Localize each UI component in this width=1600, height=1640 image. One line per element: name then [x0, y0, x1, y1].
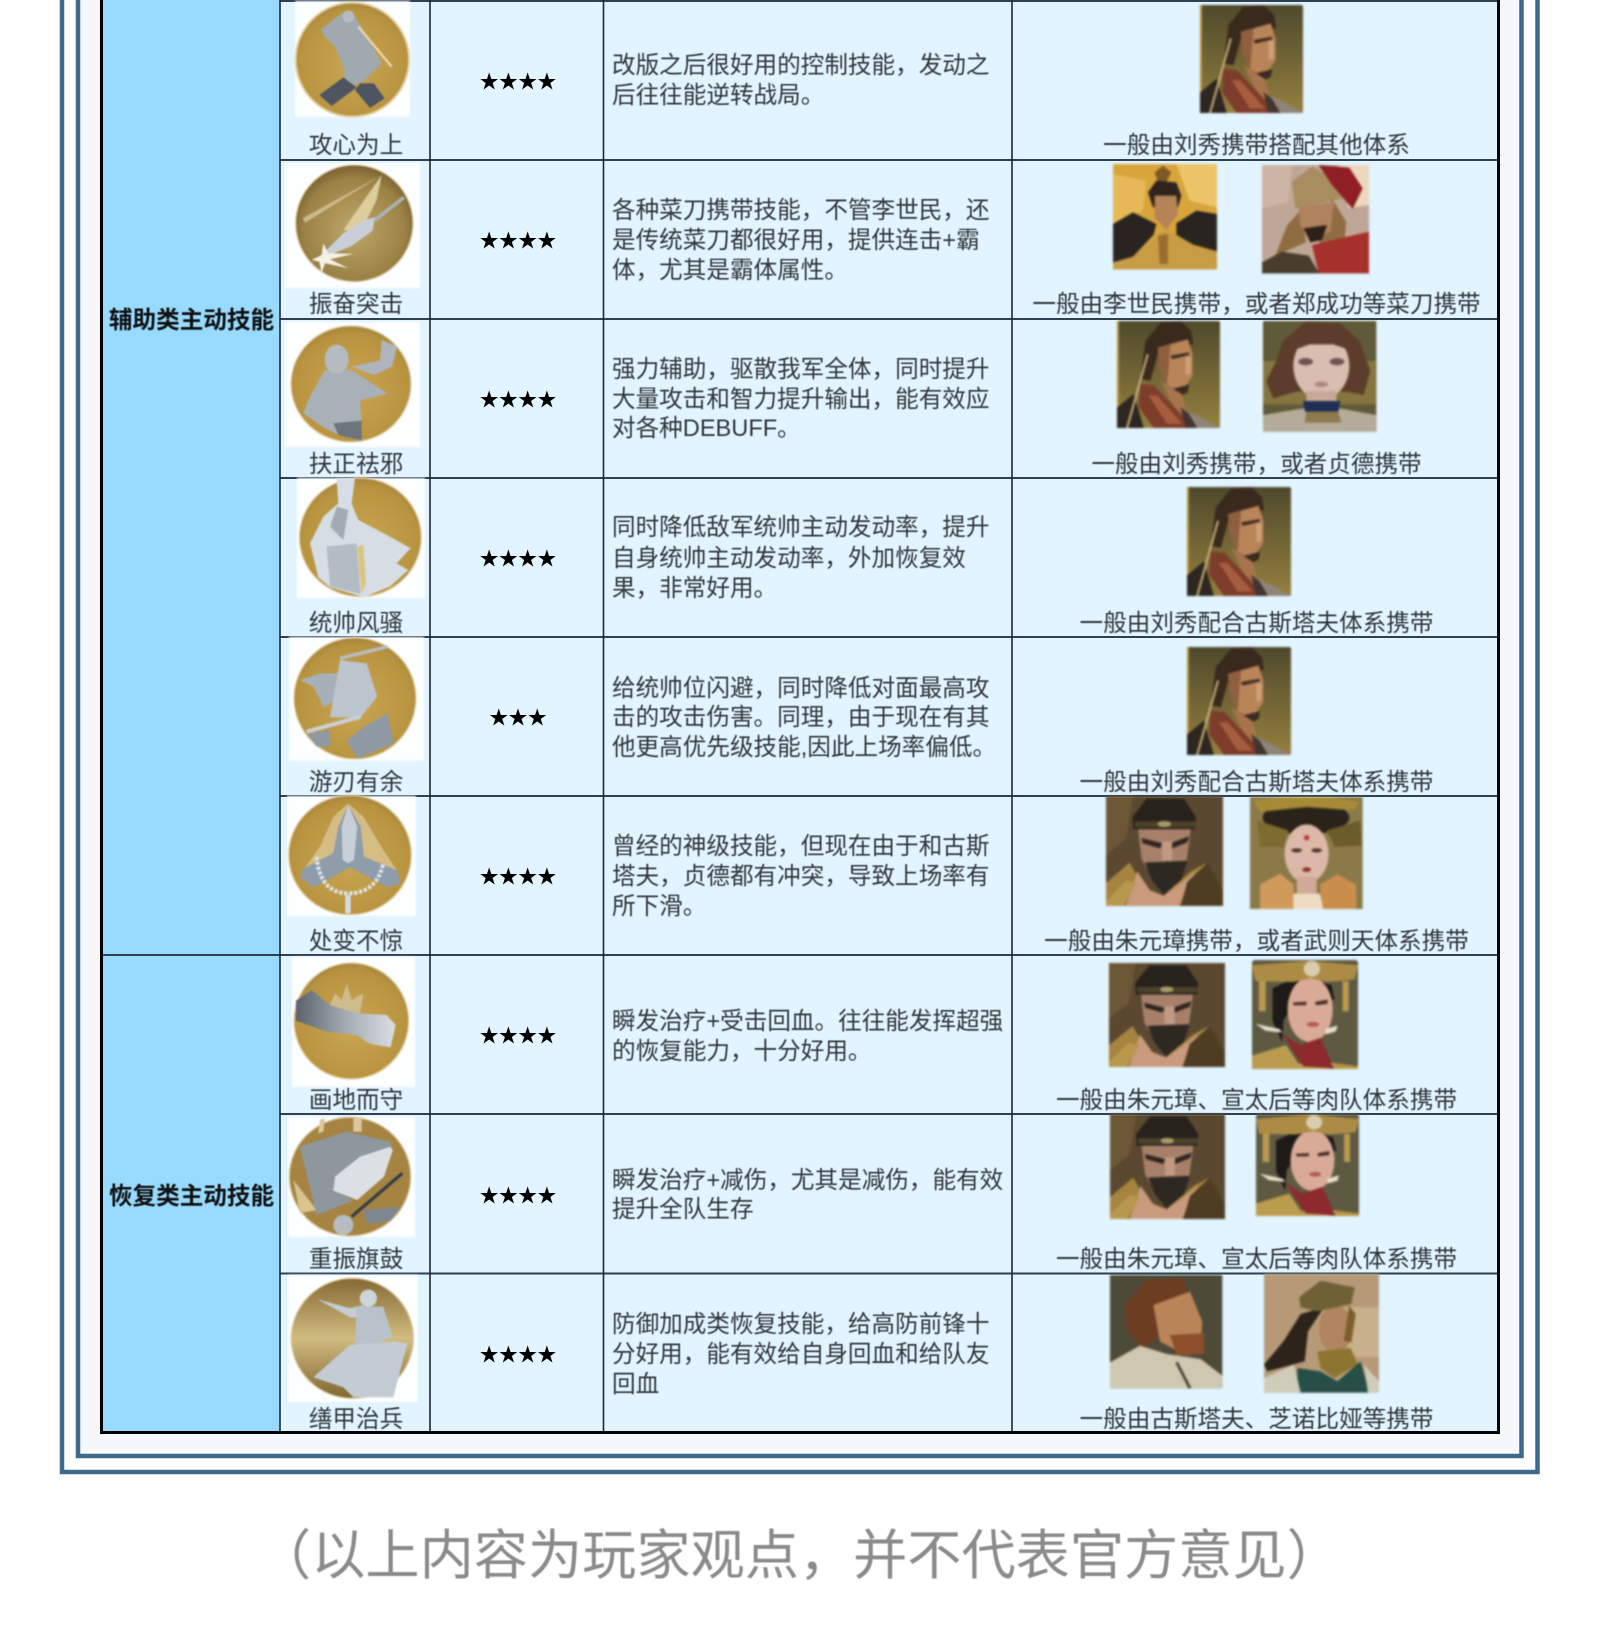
- rating stars: ★★★★: [479, 1339, 557, 1367]
- portrait: 刘秀: [1117, 321, 1220, 428]
- portrait: 刘秀: [1187, 487, 1291, 596]
- description: 瞬发治疗+受击回血。往往能发挥超强: [612, 1008, 1003, 1035]
- row: 处变不惊: [287, 795, 1469, 955]
- carrier note: 一般由刘秀配合古斯塔夫体系携带: [1080, 769, 1433, 796]
- icon: 振奋突击: [285, 163, 420, 288]
- row: 重振旗鼓: [288, 1114, 1457, 1273]
- icon: 攻心为上: [295, 1, 410, 117]
- description: 给统帅位闪避，同时降低对面最高攻: [612, 675, 990, 702]
- portrait: 宣太后: [1256, 1114, 1359, 1216]
- skill name: 重振旗鼓: [309, 1246, 403, 1273]
- description: 果，非常好用。: [612, 575, 777, 602]
- description: [612, 675, 996, 761]
- carrier note: 一般由朱元璋、宣太后等肉队体系携带: [1056, 1246, 1457, 1273]
- skill name: 缮甲治兵: [309, 1406, 403, 1433]
- description: 他更高优先级技能,因此上场率偏低。: [612, 734, 996, 761]
- portrait: 贞德: [1263, 321, 1376, 432]
- category label: 恢复类主动技能: 恢复类主动技能: [109, 1183, 274, 1210]
- description: [612, 52, 990, 109]
- carrier note: 一般由李世民携带，或者郑成功等菜刀携带: [1032, 291, 1481, 318]
- carrier note: 一般由刘秀配合古斯塔夫体系携带: [1080, 610, 1433, 637]
- portrait: 李世民: [1113, 164, 1217, 269]
- description: 体，尤其是霸体属性。: [612, 257, 848, 284]
- description: 后往往能逆转战局。: [612, 82, 824, 109]
- skill name: 扶正祛邪: [309, 451, 403, 478]
- description: [612, 1311, 990, 1398]
- rating stars: ★★★: [489, 702, 547, 730]
- portrait: 朱元璋: [1106, 796, 1223, 906]
- portrait: 古斯塔夫: [1110, 1275, 1222, 1388]
- description: 回血: [612, 1371, 659, 1398]
- description: 防御加成类恢复技能，给高防前锋十: [612, 1311, 990, 1338]
- row: 攻心为上: [295, 1, 1410, 159]
- carrier note: 一般由刘秀携带，或者贞德携带: [1091, 451, 1422, 478]
- skill name: 游刃有余: [309, 769, 404, 796]
- portrait: 宣太后: [1252, 960, 1358, 1069]
- description: [612, 1008, 1003, 1065]
- portrait: 武则天: [1250, 797, 1363, 909]
- description: 的恢复能力，十分好用。: [612, 1038, 872, 1065]
- icon: 重振旗鼓: [288, 1117, 415, 1237]
- row: 统帅风骚: [297, 478, 1433, 637]
- skill name: 振奋突击: [309, 291, 403, 318]
- rating stars: ★★★★: [479, 861, 557, 889]
- description: 大量攻击和智力提升输出，能有效应: [612, 386, 990, 413]
- description: 对各种DEBUFF。: [612, 415, 801, 442]
- icon: 处变不惊: [287, 795, 416, 916]
- description: 各种菜刀携带技能，不管李世民，还: [612, 197, 990, 224]
- carrier note: 一般由朱元璋携带，或者武则天体系携带: [1044, 928, 1469, 955]
- portrait: 刘秀: [1187, 647, 1291, 755]
- rating stars: ★★★★: [479, 1180, 557, 1208]
- description: [612, 514, 990, 602]
- rating stars: ★★★★: [479, 1020, 557, 1048]
- description: [612, 356, 990, 442]
- row: 缮甲治兵: [288, 1274, 1433, 1433]
- carrier note: 一般由朱元璋、宣太后等肉队体系携带: [1056, 1087, 1457, 1114]
- description: 改版之后很好用的控制技能，发动之: [612, 52, 990, 79]
- icon: 缮甲治兵: [288, 1275, 418, 1402]
- description: [612, 833, 990, 920]
- icon: 扶正祛邪: [285, 322, 420, 447]
- rating stars: ★★★★: [479, 384, 557, 412]
- table cell backgrounds: [102, 0, 1498, 1433]
- description: 是传统菜刀都很好用，提供连击+霸: [612, 227, 980, 254]
- description: [612, 1167, 1003, 1223]
- rating stars: ★★★★: [479, 225, 557, 253]
- portrait: 刘秀: [1200, 5, 1303, 113]
- skill name: 攻心为上: [309, 132, 403, 159]
- portrait: 郑成功: [1262, 165, 1369, 273]
- icon: 游刃有余: [289, 637, 424, 761]
- icon: 统帅风骚: [297, 478, 425, 598]
- portrait: 芝诺比娅: [1264, 1274, 1379, 1393]
- row: 振奋突击: [285, 163, 1481, 318]
- rating stars: ★★★★: [479, 66, 557, 94]
- description: 同时降低敌军统帅主动发动率，提升: [612, 514, 990, 541]
- carrier note: 一般由古斯塔夫、芝诺比娅等携带: [1080, 1406, 1433, 1433]
- description: 提升全队生存: [612, 1196, 754, 1223]
- description: 塔夫，贞德都有冲突，导致上场率有: [612, 863, 990, 890]
- footer disclaimer: （以上内容为玩家观点，并不代表官方意见）: [257, 1526, 1341, 1586]
- carrier note: 一般由刘秀携带搭配其他体系: [1103, 132, 1410, 159]
- icon: 画地而守: [292, 957, 415, 1087]
- skill table: [100, 0, 1500, 1434]
- row: 游刃有余: [289, 637, 1433, 796]
- skill name: 处变不惊: [309, 928, 403, 955]
- description: 所下滑。: [612, 893, 706, 920]
- portrait: 朱元璋: [1109, 963, 1225, 1067]
- row: 画地而守: [292, 957, 1457, 1114]
- category label: 辅助类主动技能: 辅助类主动技能: [109, 306, 274, 334]
- description: 自身统帅主动发动率，外加恢复效: [612, 545, 966, 572]
- description: 击的攻击伤害。同理，由于现在有其: [612, 704, 990, 731]
- portrait: 朱元璋: [1110, 1114, 1225, 1219]
- skill name: 画地而守: [309, 1087, 403, 1114]
- description: 瞬发治疗+减伤，尤其是减伤，能有效: [612, 1167, 1003, 1194]
- skill name: 统帅风骚: [309, 610, 403, 637]
- description: 强力辅助，驱散我军全体，同时提升: [612, 356, 990, 383]
- rating stars: ★★★★: [479, 543, 557, 571]
- row: 扶正祛邪: [285, 321, 1422, 478]
- description: 曾经的神级技能，但现在由于和古斯: [612, 833, 990, 860]
- description: 分好用，能有效给自身回血和给队友: [612, 1341, 990, 1368]
- description: [612, 197, 990, 284]
